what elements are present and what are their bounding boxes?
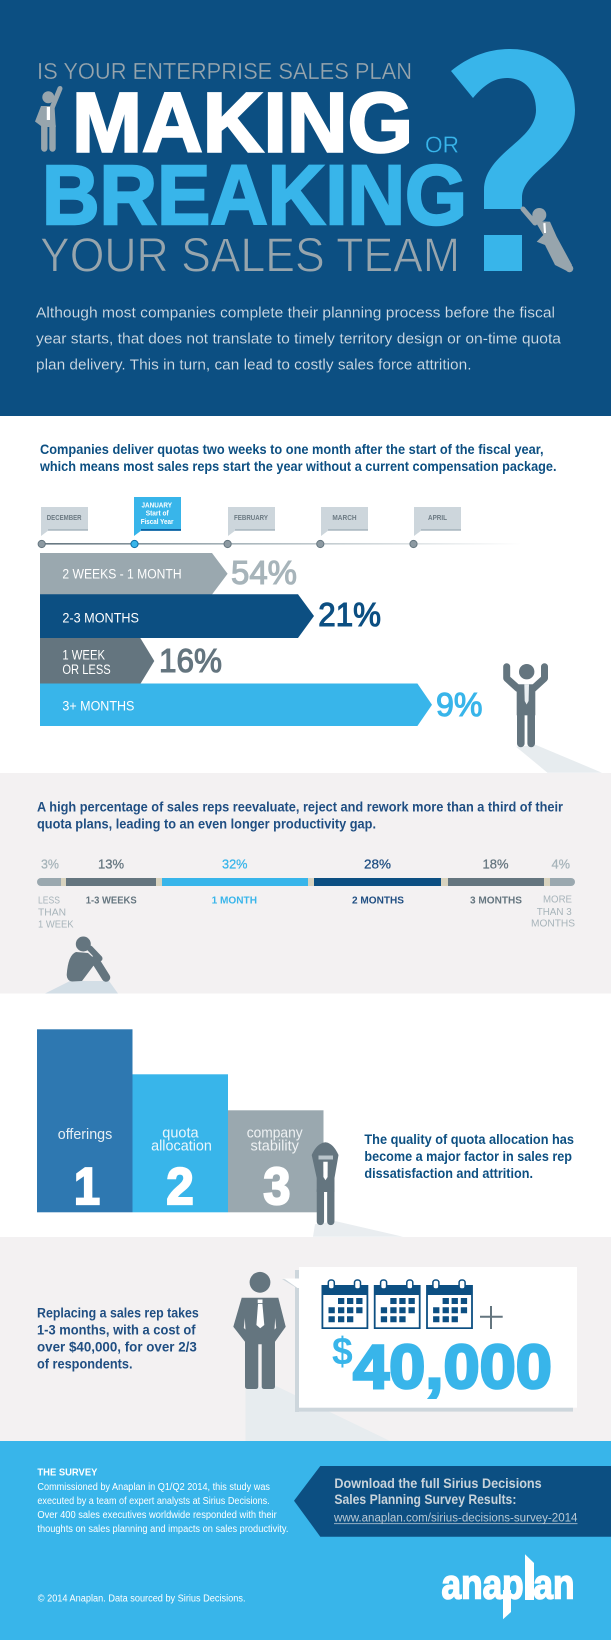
callout: download arrow: www.anaplan.com/sirius-decisions-survey-2014 [333, 1513, 578, 1525]
callout: download arrow: Sales Planning Survey Results: [334, 1492, 516, 1507]
bar: 1 week or less 16%: 1 WEEK [62, 647, 105, 662]
icon: plus [480, 1306, 503, 1329]
panel: quota rework [0, 773, 611, 994]
text block: intro paragraph: plan delivery. This in turn, can lead to costly sales force attrition. [36, 357, 472, 373]
heading: rework: quota plans, leading to an even longer productivity gap. [37, 817, 376, 832]
percent labels: 18% [482, 858, 508, 872]
title: or: OR [425, 132, 459, 158]
percent labels: 32% [222, 858, 248, 872]
percent labels: 13% [98, 858, 124, 872]
text block: the survey: executed by a team of expert analysts at Sirius Decisions. [37, 1496, 270, 1507]
icon: person waving [35, 88, 60, 148]
bar 1: offerings [37, 1029, 132, 1216]
percent labels: 4% [552, 858, 570, 872]
icon: person leaning on question mark [523, 208, 573, 272]
percent labels [41, 858, 570, 872]
bar 3: company stability: 3 [263, 1158, 290, 1216]
icon: calendar 3 [426, 1280, 473, 1329]
text block: the survey: thoughts on sales planning and impacts on sales productivity. [37, 1524, 288, 1535]
text block: the survey [37, 1467, 288, 1535]
bar 3: company stability: company [247, 1125, 303, 1141]
figure: $40,000: $ [332, 1330, 353, 1374]
bar 1: offerings: offerings [58, 1127, 112, 1143]
segment labels: 1-3 WEEKS [86, 895, 137, 907]
flag: january start of fiscal year: JANUARY [142, 501, 172, 510]
segment labels: 1 MONTH [212, 895, 257, 907]
segment labels [38, 894, 575, 931]
percent labels: 3% [41, 858, 59, 872]
icon: standing person [233, 1272, 390, 1441]
text block: intro paragraph: year starts, that does not translate to timely territory design or on-time quota [36, 331, 562, 347]
panel: factors in dissatisfaction [0, 994, 611, 1237]
text block: quota allocation quality: The quality of quota allocation has [364, 1132, 574, 1147]
bar: 3+ months 9%: 3+ MONTHS [62, 698, 134, 713]
flag: february: FEBRUARY [234, 513, 268, 522]
callout: download arrow: Download the full Sirius Decisions [334, 1476, 542, 1491]
icon: question mark [451, 49, 575, 271]
heading: rework [37, 800, 564, 832]
flag: march [321, 507, 368, 536]
percent labels: 28% [364, 858, 391, 872]
flag: april: APRIL [428, 513, 447, 522]
flag: december [41, 507, 88, 536]
icon: calendar 2 [374, 1280, 421, 1329]
flag: january start of fiscal year: Start of [146, 509, 169, 518]
segment labels: 3 MONTHS [470, 895, 522, 907]
heading: quota delivery: Companies deliver quotas two weeks to one month after the start of the fiscal year, [40, 442, 544, 457]
segment labels: 2 MONTHS [352, 895, 404, 907]
segment labels: MORE [543, 894, 572, 906]
heading: rework: A high percentage of sales reps reevaluate, reject and rework more than a third of their [37, 800, 564, 815]
segment labels: THAN 3 [537, 906, 572, 918]
text block: replacing a sales rep: over $40,000, for over 2/3 [37, 1340, 197, 1355]
segment labels: LESS [38, 895, 60, 907]
panel: footer [0, 1441, 611, 1640]
flag: march: MARCH [332, 513, 357, 522]
flag: april [414, 507, 461, 536]
flag: december: DECEMBER [47, 513, 82, 522]
title: breaking: BREAKING [42, 148, 467, 242]
bar: 3+ months 9% [40, 684, 482, 726]
bar: 3+ months 9%: 9% [436, 686, 482, 723]
heading: quota delivery: which means most sales reps start the year without a current compensation package. [39, 459, 557, 474]
text block: quota allocation quality: become a major factor in sales rep [364, 1149, 572, 1164]
heading: quota delivery [39, 442, 557, 474]
panel: header [0, 0, 611, 416]
text block: intro paragraph [36, 305, 562, 373]
text block: the survey: Commissioned by Anaplan in Q1/Q2 2014, this study was [37, 1482, 270, 1493]
logo: anaplan [442, 1554, 574, 1619]
timeline [38, 497, 522, 548]
segment labels: MONTHS [531, 918, 575, 930]
panel: quota delivery timing [0, 416, 611, 773]
text block: replacing a sales rep: 1-3 months, with a cost of [37, 1322, 196, 1337]
bar: 2-3 months 21%: 21% [318, 596, 381, 633]
callout: download arrow [294, 1466, 611, 1537]
segmented bar [37, 878, 575, 886]
bar: 2-3 months 21% [40, 594, 381, 638]
bar 3: company stability [228, 1110, 324, 1216]
text block: replacing a sales rep [37, 1306, 199, 1371]
bar 2: quota allocation: quota [162, 1125, 199, 1141]
bar: 1 week or less 16%: 16% [159, 642, 222, 679]
flag: january start of fiscal year [134, 497, 181, 536]
flag: january start of fiscal year: Fiscal Year [141, 517, 173, 526]
bar 1: offerings: 1 [74, 1158, 100, 1216]
title line: your sales team: YOUR SALES TEAM [40, 230, 460, 283]
flag: february [228, 507, 275, 536]
text block: replacing a sales rep: Replacing a sales rep takes [37, 1306, 199, 1321]
icon: person with arms raised [507, 664, 602, 773]
title: making: MAKING [72, 76, 413, 170]
text block: replacing a sales rep: of respondents. [37, 1356, 132, 1371]
bar: 2 weeks - 1 month 54%: 2 WEEKS - 1 MONTH [62, 566, 182, 581]
bar 2: quota allocation: 2 [166, 1158, 194, 1216]
bar: 2 weeks - 1 month 54%: 54% [231, 554, 297, 591]
text block: quota allocation quality: dissatisfaction and attrition. [364, 1166, 533, 1181]
title line: is your enterprise sales plan: IS YOUR ENTERPRISE SALES PLAN [37, 58, 412, 84]
callout: cost bubble [282, 1267, 577, 1412]
text block: quota allocation quality [364, 1132, 574, 1181]
icon: calendar 1 [322, 1280, 368, 1329]
bar: 1 week or less 16% [40, 638, 222, 684]
bar: 1 week or less 16%: OR LESS [62, 662, 111, 677]
text block: intro paragraph: Although most companies complete their planning process before the fiscal [36, 305, 555, 321]
icon: person hands on head [312, 1142, 403, 1237]
bar: 2-3 months 21%: 2-3 MONTHS [62, 610, 139, 625]
figure: $40,000: 40,000 [353, 1333, 552, 1402]
text block: copyright: © 2014 Anaplan. Data sourced by Sirius Decisions. [38, 1594, 245, 1605]
bar: 2 weeks - 1 month 54% [40, 553, 297, 594]
text block: the survey: THE SURVEY [37, 1467, 97, 1479]
segment labels: 1 WEEK [38, 919, 74, 931]
bar 2: quota allocation [132, 1074, 228, 1216]
bar 2: quota allocation: allocation [151, 1139, 212, 1155]
text block: the survey: Over 400 sales executives worldwide responded with their [37, 1510, 277, 1521]
bar 3: company stability: stability [250, 1139, 300, 1155]
logo: anaplan: anaplan [442, 1560, 574, 1608]
segment labels: THAN [38, 907, 66, 919]
panel: replacement cost [0, 1237, 611, 1441]
icon: sitting person [45, 936, 118, 994]
